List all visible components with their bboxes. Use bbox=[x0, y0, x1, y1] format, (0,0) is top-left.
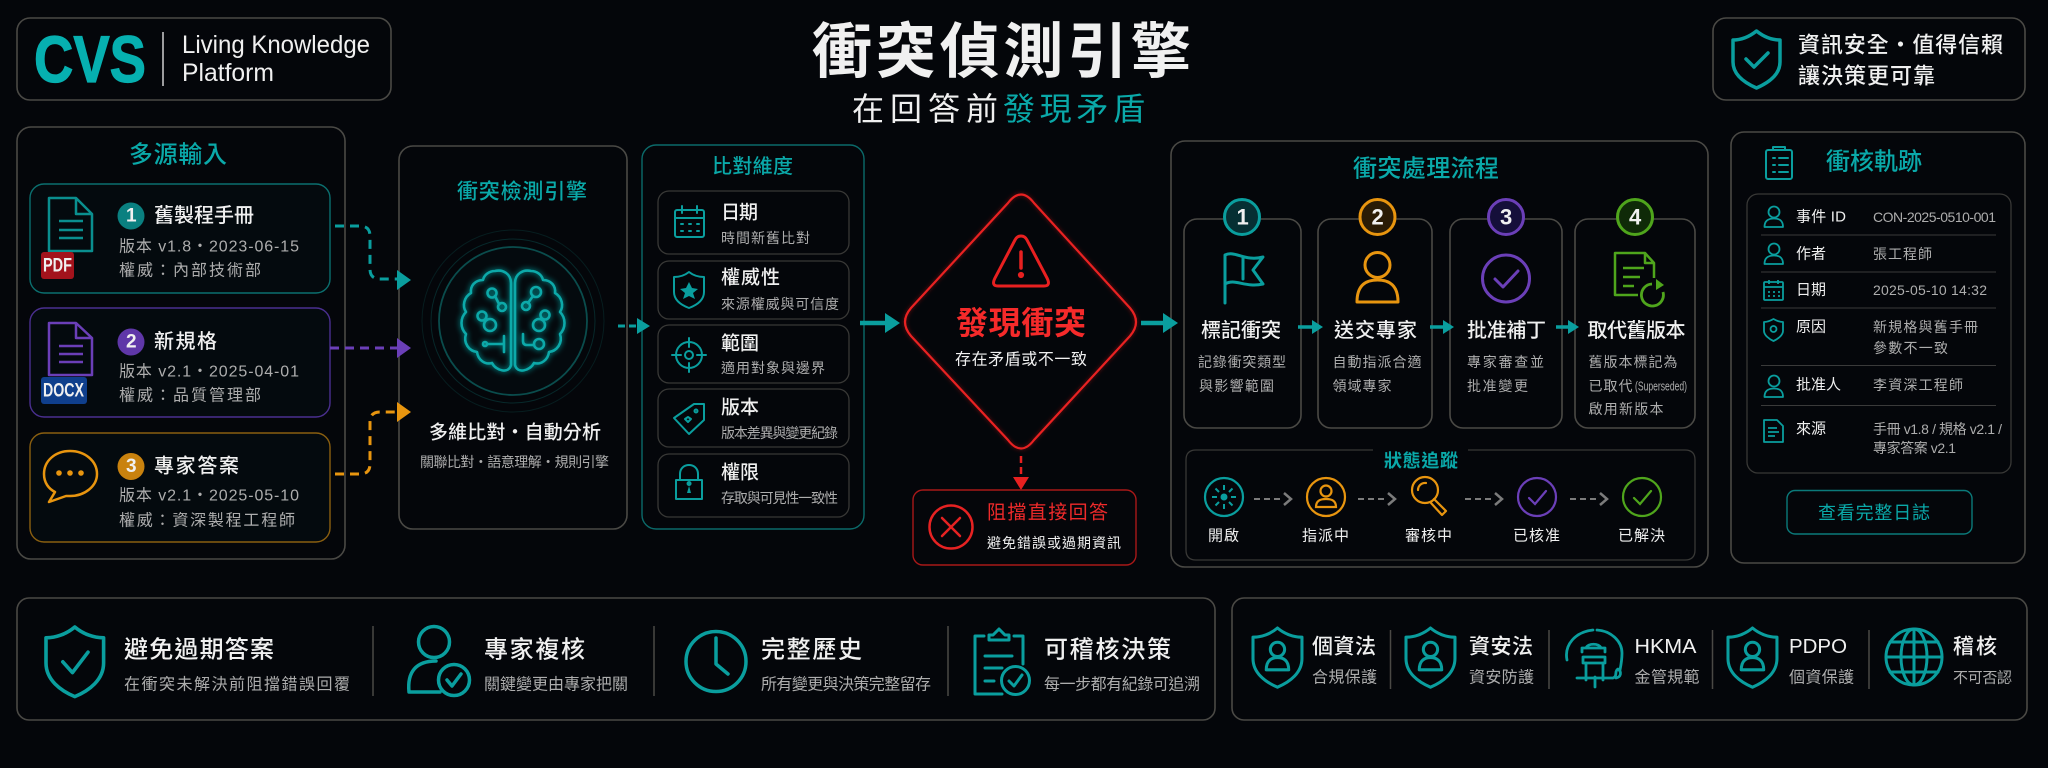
table: audit details: 來源 bbox=[1796, 420, 1826, 438]
diamond: conflict found: 存在矛盾或不一致 bbox=[955, 350, 1087, 368]
benefit: avoid outdated answers: 避免過期答案 bbox=[124, 636, 274, 664]
step 4: replace old version: 啟用新版本 bbox=[1588, 401, 1664, 417]
compliance: personal data law bbox=[1253, 628, 1377, 687]
table: audit details: CON-2025-0510-001 bbox=[1873, 209, 1996, 225]
text: multidimensional comparison: 多維比對・自動分析 bbox=[429, 422, 601, 444]
step 4: replace old version bbox=[1575, 200, 1695, 428]
row: scope bbox=[658, 325, 849, 383]
dividers: benefits bbox=[373, 626, 948, 696]
card: expert answer: 3 bbox=[126, 456, 137, 477]
compliance: cybersecurity law bbox=[1406, 628, 1534, 687]
icon: clipboard bbox=[1766, 147, 1792, 179]
row: permission: 權限 bbox=[721, 462, 759, 484]
callout: block direct answer: 阻擋直接回答 bbox=[987, 502, 1108, 524]
subtitle: 在回答前 bbox=[852, 91, 998, 127]
arrow: step 2 to 3 bbox=[1430, 320, 1454, 334]
heading: dimensions: 比對維度 bbox=[712, 155, 793, 178]
logo: CVS Living Knowledge Platform: Platform bbox=[182, 59, 274, 87]
step 3: approve patch: 專家審查並 bbox=[1467, 354, 1544, 370]
status: open bbox=[1205, 478, 1243, 544]
arrow: expert answer to engine bbox=[335, 402, 411, 474]
table: audit details: 作者 bbox=[1796, 246, 1826, 262]
compliance: personal data law: 個資法 bbox=[1312, 636, 1376, 658]
status: assigned: 指派中 bbox=[1302, 528, 1349, 544]
arrow: dimensions to conflict bbox=[860, 313, 900, 333]
table: audit details: 專家答案 v2.1 bbox=[1873, 440, 1956, 456]
card: new specification: 權威：品質管理部 bbox=[119, 386, 261, 404]
step 4: replace old version: 4 bbox=[1629, 204, 1642, 230]
compliance: PDPO bbox=[1728, 628, 1854, 687]
icon: brain bbox=[422, 230, 604, 412]
card: new specification: 版本 v2.1・2025-04-01 bbox=[119, 362, 299, 380]
heading: engine: 衝突檢測引擎 bbox=[457, 180, 587, 204]
row: permission bbox=[658, 454, 849, 517]
card: old process manual: PDF bbox=[43, 256, 72, 276]
badge: information security bbox=[1713, 18, 2025, 100]
heading: multi-source input: 多源輸入 bbox=[129, 142, 227, 168]
heading: audit trail: 衝核軌跡 bbox=[1826, 148, 1922, 176]
arrow: engine to dimensions bbox=[618, 318, 650, 334]
card: old process manual: 版本 v1.8・2023-06-15 bbox=[119, 238, 299, 256]
panel: conflict handling process bbox=[1171, 141, 1708, 567]
card: old process manual: 1 bbox=[126, 206, 137, 226]
step 1: flag conflict bbox=[1184, 200, 1301, 428]
step 4: replace old version: 取代舊版本 bbox=[1588, 319, 1686, 342]
step 2: send to expert: 2 bbox=[1372, 204, 1384, 230]
row: date: 日期 bbox=[721, 202, 758, 224]
subtitle bbox=[852, 91, 1145, 127]
table: audit details: 原因 bbox=[1796, 318, 1826, 336]
step 1: flag conflict: 標記衝突 bbox=[1201, 319, 1281, 342]
button: view full log bbox=[1787, 490, 1972, 534]
icon: warning bbox=[994, 236, 1048, 286]
callout: block direct answer bbox=[913, 490, 1136, 565]
step 3: approve patch bbox=[1450, 200, 1562, 428]
heading: process: 衝突處理流程 bbox=[1353, 156, 1499, 182]
compliance: PDPO: 個資保護 bbox=[1789, 668, 1854, 686]
compliance: personal data law: 合規保護 bbox=[1312, 668, 1377, 686]
panel: compliance bbox=[1232, 598, 2027, 720]
benefit: auditable decisions: 每一步都有紀錄可追溯 bbox=[1044, 676, 1200, 694]
benefit: expert review: 專家複核 bbox=[484, 636, 585, 664]
logo: CVS Living Knowledge Platform bbox=[17, 18, 391, 100]
compliance: cybersecurity law: 資安防護 bbox=[1469, 668, 1534, 686]
row: permission: 存取與可見性一致性 bbox=[721, 490, 838, 506]
arrow: step 3 to 4 bbox=[1556, 320, 1579, 334]
arrows: status dashes bbox=[1254, 493, 1607, 505]
compliance: cybersecurity law: 資安法 bbox=[1469, 636, 1533, 658]
compliance: PDPO: PDPO bbox=[1789, 636, 1847, 658]
status: resolved bbox=[1618, 478, 1665, 544]
step 3: approve patch: 批准補丁 bbox=[1467, 319, 1546, 342]
compliance: HKMA: 金管規範 bbox=[1634, 668, 1700, 686]
panel: conflict detection engine bbox=[399, 146, 627, 529]
step 4: replace old version: 舊版本標記為 bbox=[1588, 354, 1678, 370]
arrow: specification to engine bbox=[330, 338, 411, 358]
compliance: HKMA bbox=[1567, 630, 1700, 687]
status: reviewing bbox=[1405, 477, 1452, 544]
status: reviewing: 審核中 bbox=[1405, 526, 1452, 544]
dividers: compliance bbox=[1390, 630, 1869, 689]
row: version: 版本 bbox=[721, 396, 759, 418]
status: approved: 已核准 bbox=[1513, 528, 1560, 544]
card: new specification: DOCX bbox=[43, 380, 84, 402]
step 4: replace old version: 已取代 bbox=[1588, 378, 1632, 394]
step 1: flag conflict: 1 bbox=[1236, 204, 1249, 230]
table: audit details: 李資深工程師 bbox=[1873, 377, 1963, 393]
row: authority: 來源權威與可信度 bbox=[721, 296, 839, 312]
row: authority: 權威性 bbox=[721, 266, 780, 288]
table: audit details: 日期 bbox=[1796, 282, 1826, 298]
card: new specification bbox=[30, 308, 330, 417]
arrow: block direct answer bbox=[1013, 456, 1029, 490]
benefit: full history: 所有變更與決策完整留存 bbox=[761, 674, 931, 694]
table: audit details: 新規格與舊手冊 bbox=[1873, 319, 1978, 335]
benefit: expert review: 關鍵變更由專家把關 bbox=[484, 676, 628, 694]
step 2: send to expert: 自動指派合適 bbox=[1332, 354, 1422, 370]
card: old process manual: 權威：內部技術部 bbox=[119, 262, 261, 280]
card: new specification: 新規格 bbox=[154, 330, 217, 353]
panel: benefits bbox=[17, 598, 1215, 720]
panel: audit trail bbox=[1731, 132, 2025, 563]
badge: information security: 資訊安全・值得信賴 bbox=[1798, 32, 2003, 58]
title: 衝突偵測引擎 bbox=[812, 18, 1191, 86]
card: expert answer: 專家答案 bbox=[154, 454, 239, 478]
row: date: 時間新舊比對 bbox=[721, 230, 810, 246]
panel: multi-source input bbox=[17, 127, 345, 559]
row: scope: 範圍 bbox=[721, 332, 759, 354]
callout: block direct answer: 避免錯誤或過期資訊 bbox=[987, 535, 1121, 551]
step 2: send to expert: 領域專家 bbox=[1332, 378, 1392, 394]
badge: information security: 讓決策更可靠 bbox=[1798, 64, 1935, 88]
card: expert answer: 權威：資深製程工程師 bbox=[119, 512, 295, 530]
step 2: send to expert bbox=[1318, 200, 1432, 428]
row: date bbox=[658, 191, 849, 254]
row: authority bbox=[658, 261, 849, 319]
status tracking: 狀態追蹤 bbox=[1384, 451, 1458, 471]
step 3: approve patch: 3 bbox=[1500, 204, 1512, 230]
table: audit details: 批准人 bbox=[1796, 376, 1841, 394]
table: audit details: 事件 ID bbox=[1796, 208, 1846, 226]
benefit: auditable decisions: 可稽核決策 bbox=[1044, 636, 1171, 664]
benefit: expert review bbox=[409, 626, 628, 696]
arrow: step 1 to 2 bbox=[1298, 320, 1323, 334]
step 3: approve patch: 批准變更 bbox=[1467, 378, 1528, 394]
status: approved bbox=[1513, 478, 1560, 544]
compliance: audit non-repudiation: 不可否認 bbox=[1953, 670, 2012, 686]
step 1: flag conflict: 記錄衝突類型 bbox=[1198, 354, 1286, 370]
row: scope: 適用對象與邊界 bbox=[721, 360, 825, 376]
button: view full log: 查看完整日誌 bbox=[1818, 503, 1930, 523]
logo: CVS Living Knowledge Platform: CVS bbox=[34, 22, 146, 96]
panel: comparison dimensions bbox=[642, 145, 864, 529]
row: version bbox=[658, 389, 849, 447]
table: audit details: 張工程師 bbox=[1873, 246, 1932, 262]
benefit: avoid outdated answers: 在衝突未解決前阻擋錯誤回覆 bbox=[124, 676, 350, 694]
step 1: flag conflict: 與影響範圍 bbox=[1199, 378, 1274, 394]
benefit: full history bbox=[686, 632, 931, 694]
row: version: 版本差異與變更紀錄 bbox=[721, 425, 838, 441]
benefit: full history: 完整歷史 bbox=[761, 636, 862, 664]
card: old process manual: 舊製程手冊 bbox=[154, 204, 254, 227]
card: expert answer bbox=[30, 433, 330, 542]
table: audit details: 2025-05-10 14:32 bbox=[1873, 282, 1987, 298]
status tracking bbox=[1186, 450, 1695, 560]
compliance: audit non-repudiation bbox=[1886, 629, 2012, 686]
arrow: conflict to process bbox=[1141, 313, 1178, 333]
logo: CVS Living Knowledge Platform: Living Knowledge bbox=[182, 31, 370, 59]
status: open: 開啟 bbox=[1208, 528, 1239, 544]
card: new specification: 2 bbox=[126, 332, 137, 352]
step 4: replace old version: (Superseded) bbox=[1635, 378, 1687, 394]
card: old process manual bbox=[30, 184, 330, 293]
table: audit details: 手冊 v1.8 / 規格 v2.1 / bbox=[1873, 421, 2002, 437]
subtitle: 發現矛盾 bbox=[1003, 91, 1145, 127]
table: audit details: 參數不一致 bbox=[1873, 340, 1948, 356]
status: assigned bbox=[1302, 478, 1349, 544]
compliance: HKMA: HKMA bbox=[1634, 636, 1697, 658]
card: expert answer: 版本 v2.1・2025-05-10 bbox=[119, 486, 299, 504]
step 2: send to expert: 送交專家 bbox=[1334, 319, 1417, 342]
diamond: conflict found: 發現衝突 bbox=[956, 305, 1086, 341]
compliance: audit non-repudiation: 稽核 bbox=[1953, 636, 1997, 658]
benefit: avoid outdated answers bbox=[46, 627, 350, 697]
diamond: conflict found bbox=[905, 194, 1136, 448]
status: resolved: 已解決 bbox=[1618, 528, 1665, 544]
text: engine capabilities: 關聯比對・語意理解・規則引擎 bbox=[420, 454, 609, 470]
arrow: manual to engine bbox=[335, 226, 411, 290]
table: audit details bbox=[1747, 194, 2011, 473]
benefit: auditable decisions bbox=[975, 629, 1200, 694]
